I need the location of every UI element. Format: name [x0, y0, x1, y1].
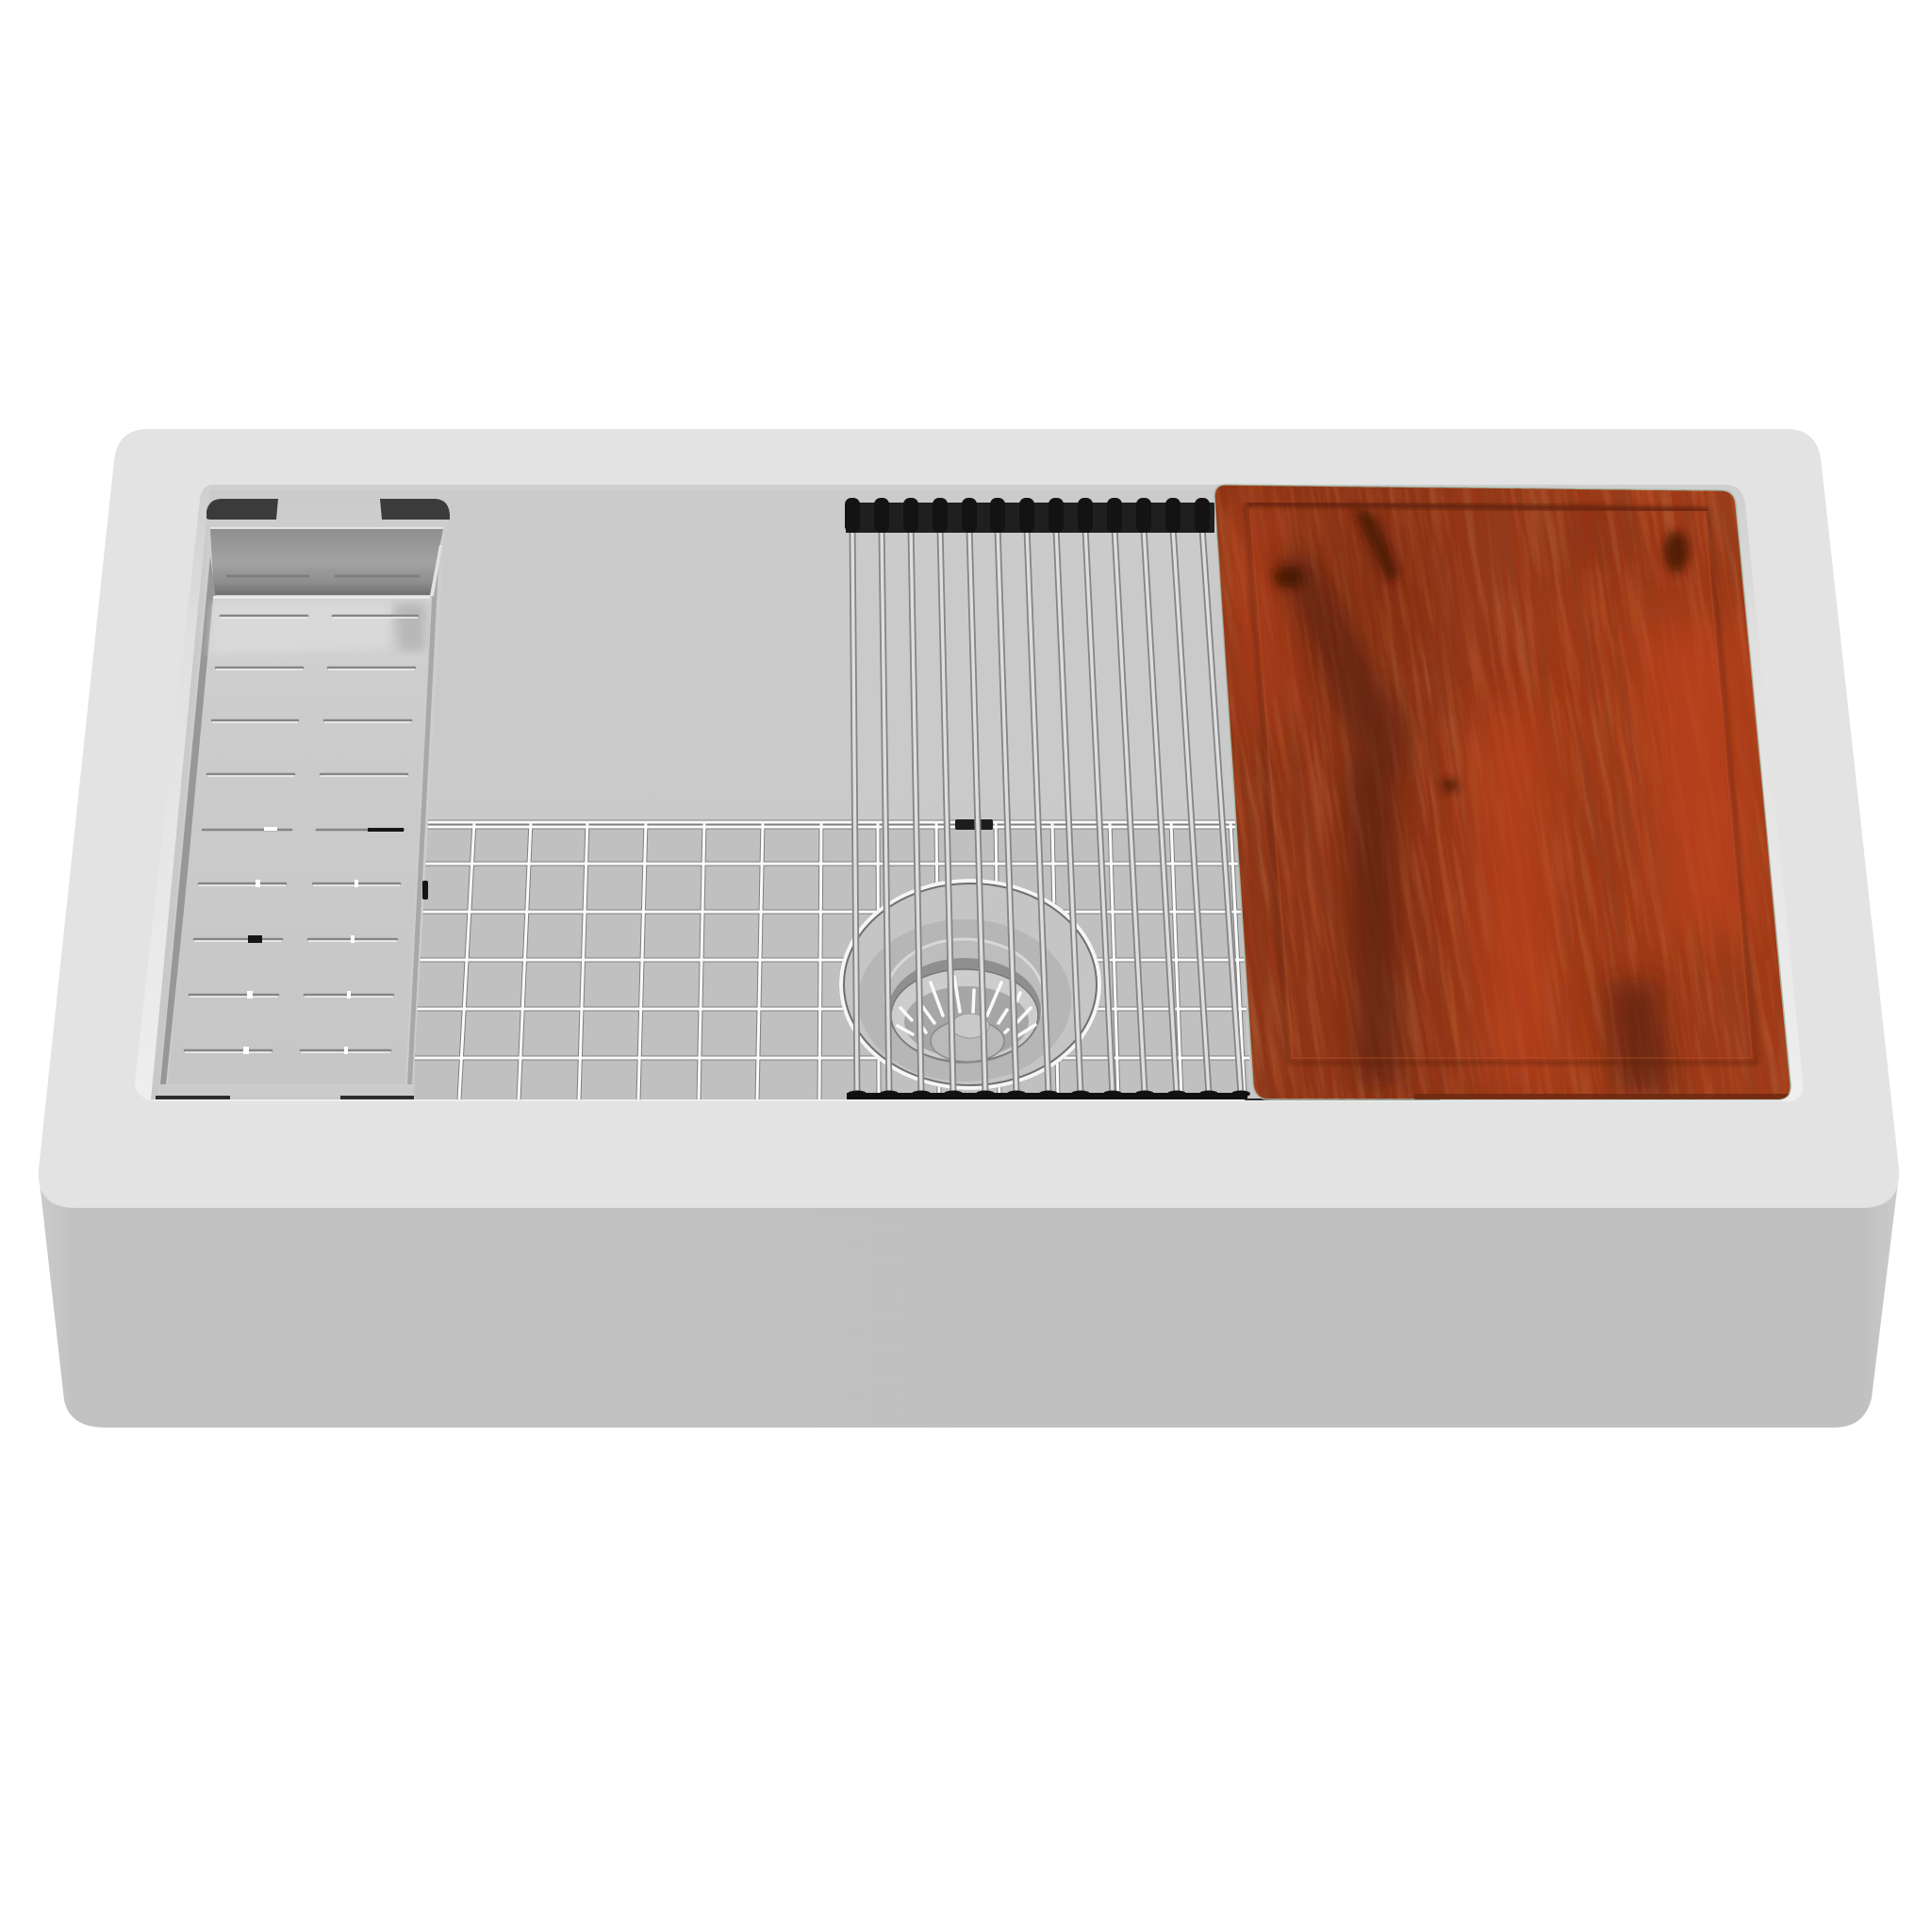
well inner ledge — [226, 575, 420, 577]
caddy bracket bar — [206, 504, 449, 524]
strainer dome — [931, 1020, 1004, 1062]
thin dark line under board — [1245, 1098, 1440, 1100]
strainer slots — [898, 977, 1035, 1036]
fine dark grain — [1214, 485, 1791, 1099]
drain assembly — [841, 881, 1099, 1088]
drain flange — [858, 919, 1071, 1082]
roll-up drying rack — [845, 498, 1440, 1100]
colander caddy — [156, 499, 450, 1099]
caddy frame — [159, 524, 445, 1087]
caddy left handle — [206, 499, 278, 520]
tray slots — [185, 616, 418, 1050]
caddy left foot — [156, 1096, 230, 1099]
wood grain — [1214, 485, 1791, 1099]
board outline — [1214, 485, 1791, 1099]
caddy back well — [210, 529, 443, 595]
caddy right rail — [407, 547, 439, 1084]
basin side walls — [135, 485, 1803, 1101]
right rail highlight — [430, 545, 442, 596]
tray light band — [209, 603, 388, 654]
fine light grain — [1215, 485, 1790, 1099]
caddy front lip — [156, 1086, 415, 1097]
small sharp knots — [1274, 509, 1689, 792]
rack top rubber bar — [845, 498, 1214, 533]
bright patches — [1226, 509, 1763, 1084]
strainer basket — [904, 986, 1029, 1058]
juice groove sides and bottom — [1246, 505, 1757, 1063]
juice groove top — [1247, 504, 1709, 510]
sink top rim — [39, 429, 1899, 1208]
basin opening — [135, 485, 1803, 1101]
slot tabs — [243, 827, 358, 1054]
caddy rim line — [210, 527, 443, 529]
caddy right foot — [340, 1096, 414, 1099]
caddy tray floor — [168, 598, 430, 1084]
drain cutout ring — [842, 882, 1098, 1087]
grid clip — [955, 819, 993, 830]
bottom grid rack — [415, 819, 1249, 1099]
board front edge — [1414, 1094, 1790, 1099]
wooden cutting board — [1214, 484, 1792, 1100]
rack rods — [852, 528, 1241, 1094]
dark knot streaks — [1273, 552, 1674, 1094]
caddy right handle — [380, 499, 450, 520]
strainer cap — [951, 1014, 989, 1038]
soft shaded patches — [1371, 511, 1622, 641]
tray rim highlight — [213, 596, 430, 599]
slot highlights — [185, 618, 418, 1052]
slot dark marks — [248, 828, 428, 943]
basin floor — [151, 489, 1773, 1099]
juice groove highlight — [1250, 509, 1752, 1058]
drain ring highlight — [841, 881, 1099, 1088]
drain collar shadow — [888, 958, 1041, 1064]
tray corner shadow — [394, 603, 426, 651]
drain collar — [885, 939, 1044, 1056]
rack bottom rubber bar — [847, 1090, 1250, 1099]
grid cell shade — [415, 822, 1249, 1099]
sink illustration — [38, 429, 1899, 1428]
sink front apron — [39, 1174, 1899, 1428]
strainer rim — [891, 969, 1038, 1062]
caddy left rail — [160, 556, 216, 1084]
